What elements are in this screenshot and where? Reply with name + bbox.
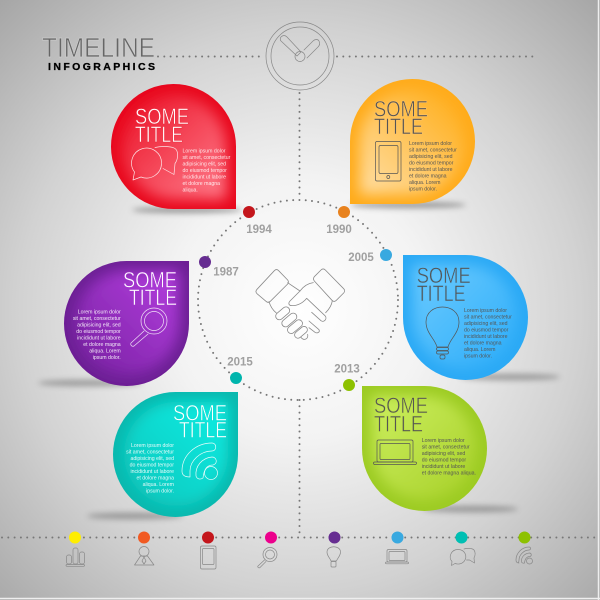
panel: purple 1987 bbox=[38, 256, 195, 391]
icon: laptop bbox=[374, 440, 416, 464]
icon: rss small bbox=[516, 547, 532, 564]
panel: purple 1987: sit amet, consectetur bbox=[73, 316, 121, 322]
bottom icons bbox=[66, 546, 532, 569]
panel: red 1994: SOME bbox=[135, 104, 189, 129]
panel: orange 1990: TITLE bbox=[374, 114, 423, 139]
panel: green 2013: do eiusmod tempor bbox=[422, 458, 466, 464]
dotted timeline circle bbox=[198, 200, 398, 400]
panel: purple 1987: aliqua. Lorem bbox=[89, 349, 121, 355]
panel: blue 2005: adipisicing elit, sed bbox=[464, 321, 508, 327]
title bbox=[42, 32, 155, 73]
panel: red 1994: do eiusmod tempor bbox=[182, 168, 227, 174]
panel: red 1994: Lorem ipsum dolor bbox=[182, 148, 226, 154]
panel: orange 1990 bbox=[345, 75, 480, 210]
panel: teal 2015: et dolore magna bbox=[136, 476, 174, 482]
panel: green 2013: TITLE bbox=[374, 412, 423, 437]
panel: orange 1990: sit amet, consectetur bbox=[409, 148, 457, 154]
panel: teal 2015: aliqua. Lorem bbox=[143, 482, 174, 488]
year markers bbox=[199, 206, 392, 391]
panel: teal 2015: adipisicing elit, sed bbox=[130, 456, 174, 462]
icon: laptop small bbox=[386, 550, 408, 564]
panel: blue 2005: TITLE bbox=[417, 281, 466, 306]
panel: purple 1987: do eiusmod tempor bbox=[76, 329, 121, 335]
year markers: 2005 bbox=[348, 252, 374, 264]
panel: orange 1990: ipsum dolor. bbox=[409, 186, 437, 192]
icon: tablet small bbox=[200, 546, 216, 569]
panel: red 1994: sit amet, consectetur bbox=[182, 155, 231, 161]
panel: blue 2005: Lorem ipsum dolor bbox=[464, 308, 507, 314]
panel: green 2013: et dolore magna aliqua. bbox=[422, 470, 476, 476]
panel: orange 1990: incididunt ut labore bbox=[409, 167, 453, 173]
panel: purple 1987: Lorem ipsum dolor bbox=[78, 310, 121, 316]
panel: purple 1987: incididunt ut labore bbox=[77, 336, 121, 342]
icon: magnifier bbox=[131, 308, 167, 346]
panel: red 1994: TITLE bbox=[135, 122, 183, 147]
panel: orange 1990: adipisicing elit, sed bbox=[409, 154, 453, 160]
icon: bar chart bbox=[66, 548, 84, 566]
icon: speech bubbles bbox=[132, 146, 178, 180]
panel: purple 1987: TITLE bbox=[129, 285, 177, 310]
panel: teal 2015: incididunt ut labore bbox=[130, 469, 174, 475]
panel: purple 1987: SOME bbox=[123, 268, 177, 293]
panel: red 1994: et dolore magna bbox=[182, 181, 220, 187]
bottom timeline dots bbox=[69, 532, 530, 544]
icon: person bbox=[134, 546, 154, 565]
panel: green 2013 bbox=[357, 381, 518, 516]
icon: handshake bbox=[256, 269, 345, 340]
panel: blue 2005 bbox=[398, 250, 560, 385]
year markers: 1994 bbox=[246, 224, 272, 236]
panel: green 2013: SOME bbox=[374, 393, 428, 418]
panel: green 2013: sit amet, consectetur bbox=[422, 444, 470, 450]
panel: blue 2005: SOME bbox=[417, 263, 471, 288]
panel: blue 2005: incididunt ut labore bbox=[464, 334, 508, 340]
panel: teal 2015: TITLE bbox=[179, 418, 227, 443]
panel: orange 1990: do eiusmod tempor bbox=[409, 160, 454, 166]
panel: red 1994 bbox=[105, 80, 242, 215]
title: INFOGRAPHICS bbox=[48, 61, 155, 73]
panel: red 1994: aliqua. bbox=[182, 188, 198, 194]
year markers: 1990 bbox=[326, 224, 352, 236]
icon: light bulb bbox=[426, 307, 459, 359]
panel: teal 2015: SOME bbox=[173, 401, 227, 426]
panel: purple 1987: ipsum dolor. bbox=[93, 355, 121, 361]
timeline connector lines bbox=[2, 56, 600, 538]
panel: blue 2005: ipsum dolor. bbox=[464, 354, 492, 360]
title: TIMELINE bbox=[42, 32, 155, 63]
icon: clock bbox=[266, 22, 334, 90]
panel: red 1994: adipisicing elit, sed bbox=[182, 162, 226, 168]
panel: blue 2005: do eiusmod tempor bbox=[464, 328, 509, 334]
panel: purple 1987: et dolore magna bbox=[83, 342, 121, 348]
icon: tablet bbox=[376, 142, 401, 181]
panel: orange 1990: SOME bbox=[374, 97, 428, 122]
panel: teal 2015: do eiusmod tempor bbox=[130, 462, 174, 468]
panel: teal 2015: sit amet, consectetur bbox=[126, 450, 174, 456]
panel: orange 1990: aliqua. Lorem bbox=[409, 180, 440, 186]
panel: purple 1987: adipisicing elit, sed bbox=[77, 323, 121, 329]
panel: blue 2005: aliqua. Lorem bbox=[464, 347, 495, 353]
panel: blue 2005: sit amet, consectetur bbox=[464, 314, 512, 320]
icon: bulb small bbox=[327, 547, 340, 567]
year markers: 2015 bbox=[227, 357, 253, 369]
panel: green 2013: incididunt ut labore bbox=[422, 464, 465, 470]
icon: magnifier small bbox=[258, 548, 277, 568]
icon: rss signal bbox=[182, 443, 218, 480]
panel: orange 1990: et dolore magna bbox=[409, 174, 447, 180]
panel: teal 2015: ipsum dolor. bbox=[146, 488, 174, 494]
panel: blue 2005: et dolore magna bbox=[464, 340, 502, 346]
icon: bubbles small bbox=[450, 548, 475, 566]
year markers: 2013 bbox=[334, 364, 360, 376]
panel: red 1994: incididunt ut labore bbox=[182, 174, 226, 180]
panel: green 2013: adipisicing elit, sed bbox=[422, 451, 465, 457]
panel: orange 1990: Lorem ipsum dolor bbox=[409, 141, 452, 147]
panel: green 2013: Lorem ipsum dolor bbox=[422, 438, 465, 444]
panel: teal 2015: Lorem ipsum dolor bbox=[131, 443, 174, 449]
panel: teal 2015 bbox=[87, 387, 243, 522]
year markers: 1987 bbox=[213, 267, 239, 279]
